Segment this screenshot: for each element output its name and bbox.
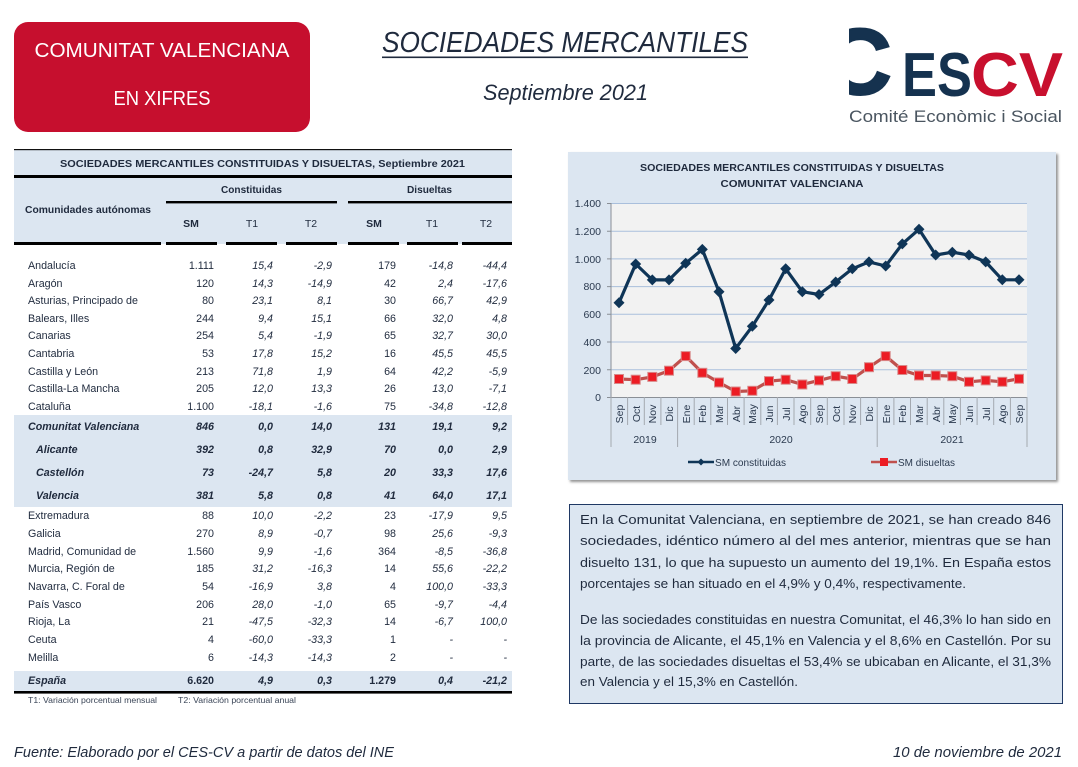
table rows lower: -2,2	[314, 510, 332, 522]
table rows Comunitat Valenciana: 20	[383, 467, 396, 479]
table rows lower: 14	[384, 616, 396, 628]
table rows lower: Murcia, Región de	[28, 563, 115, 575]
table rows upper: 80	[202, 295, 214, 307]
x axis months: Jul	[981, 407, 993, 421]
table rows Comunitat Valenciana: 70	[384, 444, 396, 456]
table rows Comunitat Valenciana: 14,0	[311, 421, 332, 433]
x axis months: Ago	[997, 405, 1009, 423]
legend	[688, 457, 955, 469]
table rows lower: 4	[208, 634, 214, 646]
chart title	[640, 162, 944, 190]
table rows Comunitat Valenciana: 131	[378, 421, 396, 433]
table rows lower: 364	[378, 546, 396, 558]
footer: source: Fuente: Elaborado por el CES-CV a partir de datos del INE	[14, 744, 395, 761]
table rows upper: 213	[196, 366, 214, 378]
table rows upper: -14,9	[308, 278, 332, 290]
y axis labels: 400	[583, 337, 601, 349]
table rows Comunitat Valenciana: 5,8	[258, 490, 273, 502]
table rows lower: 1.560	[187, 546, 214, 558]
table header: SOCIEDADES MERCANTILES CONSTITUIDAS Y DISUELTAS, Septiembre 2021	[60, 158, 465, 170]
table rows lower: -14,3	[308, 652, 332, 664]
x axis months: Feb	[697, 405, 709, 423]
table row España	[28, 675, 507, 687]
table header: SM	[366, 218, 382, 230]
table rows lower: 25,6	[431, 528, 453, 540]
table rows lower	[28, 510, 507, 664]
table rows lower: 88	[202, 510, 214, 522]
table header: Comunidades autónomas	[25, 204, 151, 216]
y axis labels: 1.400	[575, 198, 601, 210]
table rows lower: -	[503, 634, 507, 646]
table rows lower: -60,0	[249, 634, 273, 646]
x axis months: Sep	[614, 405, 626, 423]
table rows upper: 32,0	[432, 313, 453, 325]
x axis months: Mar	[914, 404, 926, 423]
table rows Comunitat Valenciana: Alicante	[35, 444, 78, 456]
table header: T1	[426, 218, 438, 230]
table header: T2	[480, 218, 492, 230]
table rows lower: -8,5	[435, 546, 453, 558]
table rows lower: -1,0	[314, 599, 332, 611]
table rows Comunitat Valenciana: 32,9	[311, 444, 332, 456]
table rows lower: Rioja, La	[28, 616, 70, 628]
table rows Comunitat Valenciana: 41	[383, 490, 396, 502]
x axis months: Sep	[1014, 405, 1026, 423]
line: SM disueltas	[619, 356, 1019, 392]
table rows Comunitat Valenciana: 17,6	[486, 467, 507, 479]
table row España: 1.279	[369, 675, 396, 687]
table rows upper: 254	[196, 330, 214, 342]
logo: CES-CV: C	[824, 9, 892, 114]
table rows lower: Navarra, C. Foral de	[28, 581, 125, 593]
panel: commentary text: En la Comunitat Valenciana, en septiembre de 2021, se han creado 846	[580, 512, 1051, 527]
table rows lower: 2	[390, 652, 396, 664]
panel: commentary text: disuelto 131, lo que ha supuesto un aumento del 19,1%. En España estos	[580, 555, 1052, 570]
table rows lower: -16,9	[249, 581, 273, 593]
y axis labels: 1.000	[575, 254, 601, 266]
table rows upper: 42,9	[486, 295, 507, 307]
table rows lower: Madrid, Comunidad de	[28, 546, 136, 558]
table rows upper: 4,8	[492, 313, 507, 325]
table rows upper: 71,8	[252, 366, 273, 378]
table rows Comunitat Valenciana: -24,7	[249, 467, 274, 479]
panel: commentary text: la provincia de Alicante, el 45,1% en Valencia y el 8,6% en Castellón. Por su	[580, 633, 1051, 648]
table rows lower: 185	[196, 563, 214, 575]
table rows lower: 8,9	[258, 528, 273, 540]
table header: T2	[305, 218, 317, 230]
panel: data table	[14, 149, 512, 705]
table rows upper: -1,9	[314, 330, 332, 342]
table rows upper: Cataluña	[28, 401, 71, 413]
table header: Constituidas	[221, 184, 282, 196]
table rows upper: 26	[384, 383, 396, 395]
table rows lower: 100,0	[426, 581, 453, 593]
table rows Comunitat Valenciana: Castellón	[36, 467, 85, 479]
table rows upper: 42,2	[432, 366, 453, 378]
table rows upper: Canarias	[28, 330, 71, 342]
table rows lower: -14,3	[249, 652, 273, 664]
y axis labels: 200	[583, 365, 601, 377]
table rows upper: Andalucía	[28, 260, 76, 272]
y axis labels: 600	[583, 309, 601, 321]
x axis months: Nov	[647, 404, 659, 423]
table rows lower: -16,3	[308, 563, 332, 575]
table rows Comunitat Valenciana: 381	[196, 490, 214, 502]
x axis months: Oct	[631, 406, 643, 422]
table rows lower: -	[503, 652, 507, 664]
table rows lower: 1	[390, 634, 396, 646]
table rows upper: 5,4	[258, 330, 273, 342]
table rows upper: 32,7	[432, 330, 454, 342]
table rows lower: 28,0	[251, 599, 273, 611]
table rows upper: Asturias, Principado de	[28, 295, 138, 307]
x axis months: Jun	[964, 405, 976, 422]
table rows Comunitat Valenciana: 17,1	[486, 490, 507, 502]
x axis months: Feb	[897, 405, 909, 423]
table rows upper: -7,1	[489, 383, 507, 395]
table rows upper: 45,5	[486, 348, 507, 360]
table rows upper: 16	[384, 348, 396, 360]
table rows lower: Extremadura	[28, 510, 89, 522]
x axis months: Jun	[764, 405, 776, 422]
table rows upper: 15,2	[311, 348, 332, 360]
x axis months: May	[947, 403, 959, 424]
table rows upper: 8,1	[317, 295, 332, 307]
table rows upper: 45,5	[432, 348, 453, 360]
table rows lower: 100,0	[480, 616, 507, 628]
x axis months: Sep	[814, 405, 826, 423]
table rows upper: 65	[384, 330, 396, 342]
panel: commentary text: sociedades, idéntico número al del mes anterior, mientras que se han	[580, 533, 1051, 548]
table rows upper: -17,6	[483, 278, 507, 290]
x axis months: Ago	[797, 405, 809, 423]
x axis years	[633, 434, 964, 446]
table rows upper: 13,0	[432, 383, 453, 395]
table rows upper: 179	[378, 260, 396, 272]
table rows upper: 12,0	[252, 383, 273, 395]
table rows upper: 53	[202, 348, 214, 360]
table rows lower: -0,7	[314, 528, 333, 540]
table rows lower: -33,3	[483, 581, 507, 593]
table rows upper: 1.111	[189, 260, 214, 272]
table row España: 6.620	[187, 675, 214, 687]
table rows upper: -2,9	[314, 260, 332, 272]
table rows upper: -12,8	[483, 401, 507, 413]
table row España: -21,2	[483, 675, 507, 687]
table row España: España	[28, 675, 66, 687]
y axis labels: 0	[595, 392, 601, 404]
table rows lower: -9,3	[489, 528, 507, 540]
legend: SM disueltas	[898, 457, 955, 469]
table rows Comunitat Valenciana: 33,3	[432, 467, 453, 479]
table rows upper: Castilla y León	[28, 366, 98, 378]
banner: Comunitat Valenciana en xifres: COMUNITAT VALENCIANA	[34, 39, 290, 62]
table rows lower: 6	[208, 652, 214, 664]
panel: commentary text	[570, 504, 1062, 704]
table footnotes: T1: Variación porcentual mensual	[28, 695, 157, 705]
table rows Comunitat Valenciana: 846	[196, 421, 214, 433]
footer: date: 10 de noviembre de 2021	[893, 744, 1062, 761]
table rows lower: -22,2	[483, 563, 507, 575]
panel: line chart	[568, 152, 1056, 480]
table rows upper	[28, 260, 507, 413]
subtitle: date: Septiembre 2021	[483, 80, 648, 105]
table rows upper: 30,0	[486, 330, 507, 342]
table rows Comunitat Valenciana: 0,8	[258, 444, 273, 456]
panel: commentary text: en Valencia y el 15,3% en Castellón.	[580, 674, 798, 689]
table rows lower: 14	[384, 563, 396, 575]
table rows upper: 17,8	[252, 348, 273, 360]
table rows lower: Galicia	[28, 528, 61, 540]
table rows upper: 75	[384, 401, 396, 413]
panel: commentary text: porcentajes se han situado en el 4,9% y 0,4%, respectivamente.	[580, 576, 966, 591]
x axis months: Oct	[831, 406, 843, 422]
table rows upper: Castilla-La Mancha	[28, 383, 120, 395]
x axis months: Dic	[664, 406, 676, 422]
table rows lower: 9,5	[492, 510, 507, 522]
table rows upper: -44,4	[483, 260, 507, 272]
highlighted band: España	[14, 671, 512, 691]
table rows upper: Aragón	[28, 278, 63, 290]
logo: CES-CV: CV	[971, 41, 1063, 110]
x axis months: Abr	[931, 405, 943, 422]
y axis labels: 1.200	[575, 226, 601, 238]
table rows upper: 205	[196, 383, 214, 395]
table rows Comunitat Valenciana: Valencia	[36, 490, 79, 502]
table rows lower: -	[449, 652, 453, 664]
table rows lower: 55,6	[432, 563, 453, 575]
table header: T1	[246, 218, 258, 230]
chart title: SOCIEDADES MERCANTILES CONSTITUIDAS Y DISUELTAS	[640, 162, 944, 174]
table rows upper: 244	[196, 313, 214, 325]
table rows upper: 120	[196, 278, 214, 290]
table rows lower: País Vasco	[28, 599, 81, 611]
table rows Comunitat Valenciana: 5,8	[317, 467, 332, 479]
table rows lower: 65	[384, 599, 396, 611]
x axis months: Ene	[681, 405, 693, 423]
banner: Comunitat Valenciana en xifres: EN XIFRES	[114, 87, 210, 110]
x axis months: Jul	[781, 407, 793, 421]
table rows upper: 64	[384, 366, 396, 378]
table rows upper: 23,1	[251, 295, 273, 307]
highlighted band: Comunitat Valenciana	[14, 415, 512, 507]
table footnotes	[28, 695, 296, 705]
table rows upper: 2,4	[437, 278, 453, 290]
table rows lower: -4,4	[489, 599, 507, 611]
table rows Comunitat Valenciana: 392	[196, 444, 214, 456]
table rows lower: -47,5	[249, 616, 273, 628]
table rows lower: -	[449, 634, 453, 646]
x axis months: Mar	[714, 404, 726, 423]
table rows lower: -32,3	[308, 616, 332, 628]
table header: SM	[183, 218, 199, 230]
table rows Comunitat Valenciana	[28, 421, 507, 502]
table rows upper: -34,8	[429, 401, 453, 413]
table rows lower: -17,9	[429, 510, 453, 522]
table rows lower: Melilla	[28, 652, 58, 664]
table row España: 0,4	[438, 675, 453, 687]
table rows lower: 23	[384, 510, 396, 522]
table rows upper: 66	[384, 313, 396, 325]
table rows upper: 42	[384, 278, 396, 290]
table rows upper: Cantabria	[28, 348, 74, 360]
banner: Comunitat Valenciana en xifres	[14, 22, 310, 132]
table rows upper: -18,1	[249, 401, 273, 413]
table rows Comunitat Valenciana: 19,1	[432, 421, 453, 433]
table footnotes: T2: Variación porcentual anual	[178, 695, 296, 705]
logo: CES-CV	[849, 28, 1062, 122]
table rows upper: Balears, Illes	[28, 313, 89, 325]
table rows upper: -5,9	[489, 366, 507, 378]
table rows lower: -36,8	[483, 546, 507, 558]
legend: SM constituidas	[715, 457, 786, 469]
table rows Comunitat Valenciana: 0,0	[258, 421, 273, 433]
table rows upper: 14,3	[252, 278, 273, 290]
x axis months: Dic	[864, 406, 876, 422]
table rows Comunitat Valenciana: Comunitat Valenciana	[28, 421, 139, 433]
table rows lower: 206	[196, 599, 214, 611]
table rows upper: 9,4	[258, 313, 273, 325]
table rows upper: 15,4	[252, 260, 273, 272]
table rows lower: 54	[202, 581, 214, 593]
table rows lower: Ceuta	[28, 634, 57, 646]
table rows lower: -9,7	[435, 599, 454, 611]
table rows Comunitat Valenciana: 0,8	[317, 490, 332, 502]
table rows lower: -1,6	[314, 546, 332, 558]
table rows upper: 66,7	[432, 295, 454, 307]
x axis years: 2021	[940, 434, 964, 446]
table row España: 4,9	[257, 675, 273, 687]
table rows lower: 3,8	[317, 581, 332, 593]
table header	[14, 149, 512, 245]
table rows upper: -14,8	[429, 260, 453, 272]
x axis years: 2020	[769, 434, 793, 446]
table rows upper: 1.100	[187, 401, 214, 413]
panel: commentary text: parte, de las sociedades disueltas el 53,4% se ubicaban en Alicante, el 31,3%	[580, 654, 1051, 669]
table rows upper: 15,1	[311, 313, 332, 325]
table rows upper: 1,9	[317, 366, 332, 378]
logo: CES-CV: Comité Econòmic i Social	[849, 107, 1062, 126]
table rows Comunitat Valenciana: 64,0	[432, 490, 453, 502]
x axis months: Abr	[731, 405, 743, 422]
table rows Comunitat Valenciana: 73	[202, 467, 214, 479]
logo: CES-CV: ES	[902, 41, 972, 110]
plot area	[611, 203, 1027, 397]
table rows lower: 4	[390, 581, 396, 593]
x axis months: Nov	[847, 404, 859, 423]
y axis labels	[575, 198, 601, 404]
x axis months: Ene	[881, 405, 893, 423]
title: SOCIEDADES MERCANTILES	[382, 27, 748, 59]
table rows lower: 98	[384, 528, 396, 540]
x axis months: May	[747, 403, 759, 424]
table rows lower: -33,3	[308, 634, 332, 646]
table rows lower: 270	[196, 528, 214, 540]
y axis labels: 800	[583, 281, 601, 293]
table rows Comunitat Valenciana: 2,9	[491, 444, 507, 456]
table rows lower: 10,0	[252, 510, 273, 522]
table rows lower: 9,9	[258, 546, 273, 558]
table rows lower: 21	[202, 616, 214, 628]
line: SM constituidas	[619, 229, 1019, 348]
table rows lower: 31,2	[252, 563, 273, 575]
table rows Comunitat Valenciana: 9,2	[492, 421, 507, 433]
table rows lower: -6,7	[435, 616, 454, 628]
table rows upper: 13,3	[311, 383, 332, 395]
table header: Disueltas	[407, 184, 452, 196]
x axis months	[614, 403, 1026, 424]
table row España: 0,3	[317, 675, 332, 687]
table rows upper: 30	[384, 295, 396, 307]
chart title: COMUNITAT VALENCIANA	[720, 178, 864, 190]
table rows upper: -1,6	[314, 401, 332, 413]
table rows Comunitat Valenciana: 0,0	[438, 444, 453, 456]
panel: commentary text: De las sociedades constituidas en nuestra Comunitat, el 46,3% lo han sido en	[580, 612, 1051, 627]
x axis years: 2019	[633, 434, 657, 446]
